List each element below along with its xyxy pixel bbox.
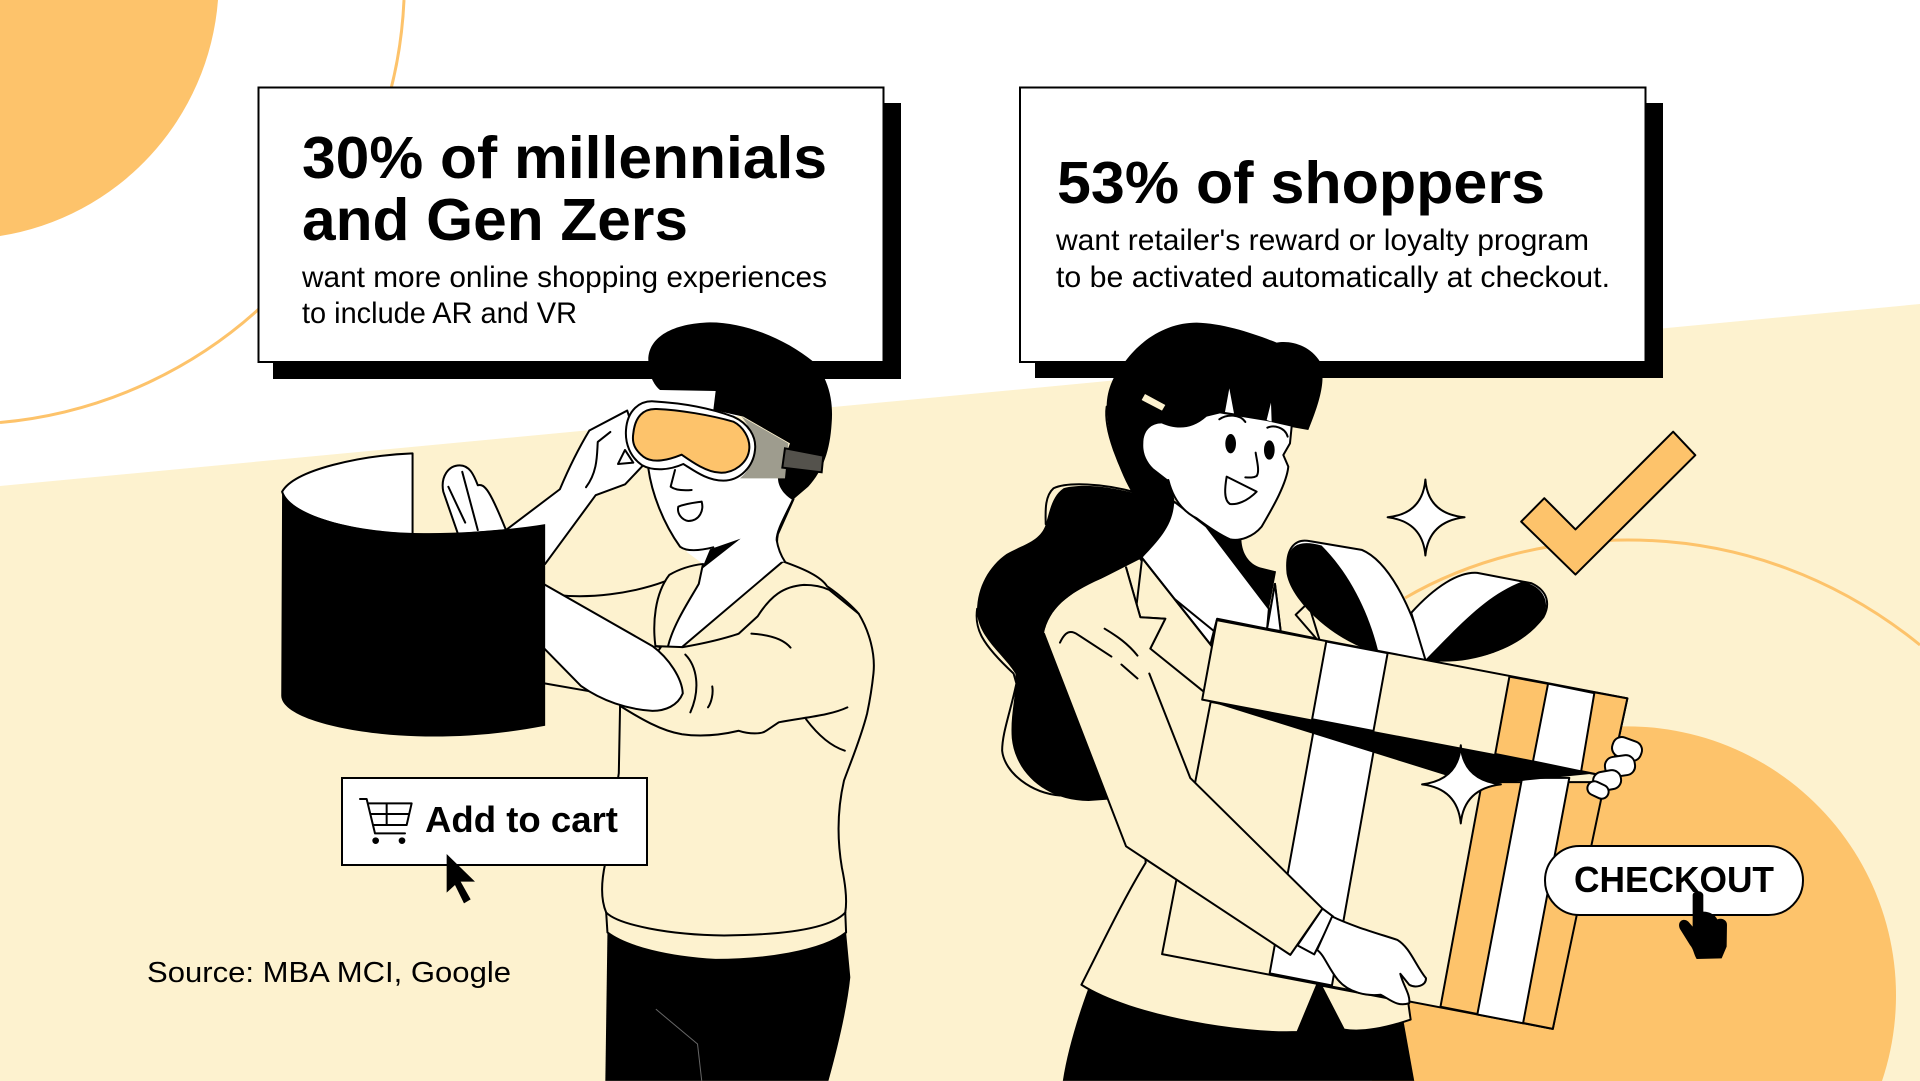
text: AR and VR: to include AR and VR [302, 297, 577, 330]
headset strap [782, 448, 823, 472]
neck edge lines [668, 499, 793, 647]
sleeve seam [620, 585, 859, 751]
mouth [678, 502, 702, 521]
nose [1245, 453, 1258, 478]
skirt [1063, 977, 1414, 1081]
ponytail outline [977, 484, 1135, 796]
cuff [1297, 909, 1333, 954]
background: top-left orange circle [0, 0, 218, 236]
panel shadow [273, 103, 901, 379]
dark collar [1206, 527, 1276, 610]
lid white stripe right [1533, 684, 1594, 771]
illustration: man with VR headset [281, 322, 874, 1081]
source note: Source: MBA MCI, Google [147, 957, 511, 989]
illustration: woman with gift [977, 323, 1645, 1081]
box fingers [1585, 734, 1645, 801]
button frame [342, 778, 647, 865]
screen hand [443, 465, 506, 534]
box body [1162, 702, 1605, 1029]
ribbon left loop [1287, 541, 1426, 661]
background: right thin arc [1405, 540, 1920, 645]
icon: check mark [1521, 432, 1695, 575]
panel: shoppers stat [1020, 88, 1663, 378]
other arm line [545, 581, 665, 692]
box body white stripe left [1270, 726, 1376, 985]
icon: sparkle [1388, 479, 1465, 555]
eyebrows [1219, 416, 1288, 437]
panel shadow [1035, 103, 1663, 378]
face [1143, 413, 1292, 540]
jacket sleeve [1044, 567, 1322, 955]
curved screen front [281, 492, 545, 737]
hair [648, 322, 832, 500]
sweater band line [606, 913, 845, 935]
nose [671, 470, 692, 490]
pill label: CHECKOUT [1574, 859, 1774, 900]
right lapel [1296, 603, 1321, 644]
curved screen back [282, 453, 413, 534]
hair clip [1142, 394, 1165, 411]
hair [1107, 323, 1323, 495]
text: want retailer's: want retailer's reward or loyalty program [1055, 224, 1589, 257]
man body [281, 411, 874, 1081]
jacket torso [1081, 558, 1411, 1032]
text: to be activated: to be activated automatically at checkout. [1056, 261, 1610, 294]
man head [618, 322, 832, 569]
icon: pointing hand [1679, 891, 1727, 959]
neck and collar [1140, 502, 1269, 646]
sparkle on box [1422, 745, 1501, 823]
sweater fill [602, 561, 874, 960]
woman arm and hand [1044, 567, 1426, 1004]
neck and chest [668, 499, 793, 647]
heading: 53% of shoppers: 53% of shoppers [1057, 150, 1545, 216]
hair lock outline [1106, 407, 1135, 493]
button: checkout [1545, 846, 1803, 915]
headset visor [633, 409, 749, 473]
background: top-left thin arc [0, 0, 404, 422]
neck shadow [702, 539, 741, 569]
sweater outline [602, 561, 874, 960]
ribbon right loop dark [1425, 582, 1546, 661]
shirt centre [1267, 584, 1281, 631]
box body white stripe right [1477, 778, 1569, 1023]
face edge lines [648, 468, 793, 562]
lid shadow [1204, 700, 1595, 784]
mouth [1225, 477, 1257, 504]
thumb [618, 450, 633, 464]
icon: mouse cursor [447, 854, 475, 903]
lid orange side [1495, 677, 1627, 777]
text: want more online: want more online shopping experiences [301, 261, 827, 294]
icon: cart [360, 799, 412, 844]
sleeve outline [1044, 567, 1322, 955]
lid [1202, 620, 1627, 777]
ponytail [977, 469, 1174, 801]
trousers [605, 932, 850, 1081]
left lapel line [1126, 558, 1217, 691]
background: bottom-right orange circle [1358, 726, 1896, 1081]
panel card [1020, 88, 1646, 362]
button label: Add to cart [425, 799, 618, 840]
screen finger lines [448, 472, 478, 530]
eyes [1225, 434, 1275, 460]
headset side [740, 417, 788, 478]
jaw line [1168, 427, 1292, 540]
lid white stripe left [1312, 641, 1388, 731]
ribbon left loop dark [1287, 543, 1378, 651]
background: cream diagonal band [0, 304, 1920, 1081]
hand finger lines [586, 432, 610, 487]
ribbon right loop [1411, 573, 1547, 661]
headset frame [626, 401, 755, 481]
woman head [1106, 323, 1323, 540]
face and neck [640, 390, 793, 563]
heading: and Gen Zers: and Gen Zers [302, 187, 688, 253]
box orange side [1440, 782, 1605, 1029]
panel card [258, 88, 884, 362]
pill [1545, 846, 1803, 915]
panel: millennials stat [258, 88, 901, 379]
raised arm and hand [507, 411, 644, 564]
heading: 30% of millennials: 30% of millennials [302, 125, 827, 191]
fringe slits [1225, 388, 1272, 422]
hand [1317, 917, 1426, 1004]
woman body [977, 469, 1414, 1081]
forearm [535, 579, 683, 711]
button: add to cart [342, 778, 647, 865]
gift box [1162, 541, 1627, 1029]
